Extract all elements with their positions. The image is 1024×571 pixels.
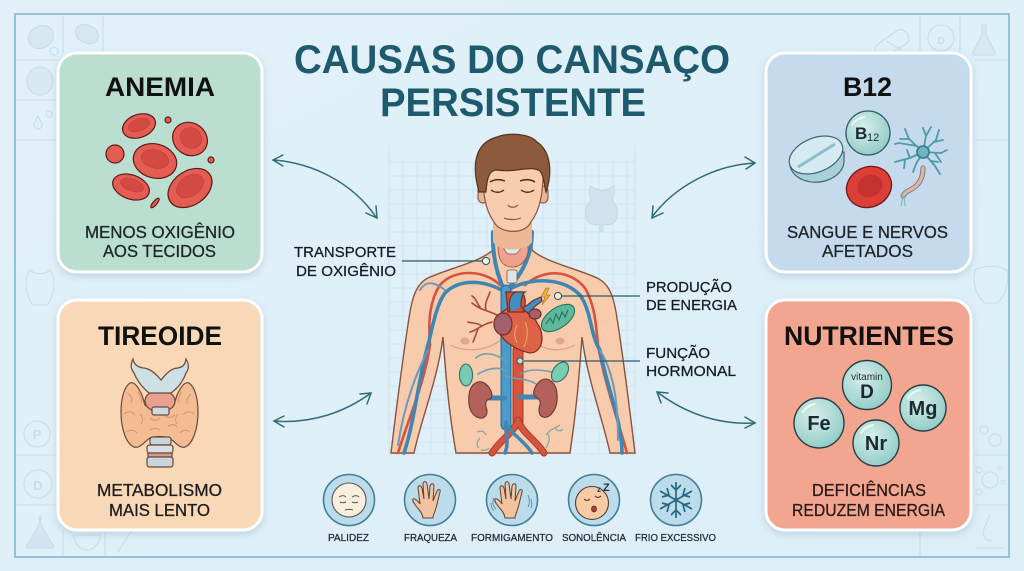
symptom: sonolência: z (597, 485, 601, 494)
arteries (398, 273, 627, 453)
closed eyes, nose and mouth (490, 180, 535, 192)
heading: nutrientes: NUTRIENTES (784, 321, 954, 351)
symptom: frio excessivo: FRIO EXCESSIVO (635, 532, 716, 544)
icon: magnesium sphere (900, 385, 946, 431)
symptom: frio excessivo (635, 474, 716, 544)
energy bolt (541, 288, 550, 305)
title: CAUSAS DO CANSAÇO (294, 38, 730, 82)
icon: vitamin d sphere: vitamin (851, 372, 883, 383)
arrow: nutrientes to body (657, 392, 755, 428)
icon: nr sphere: Nr (865, 433, 887, 455)
text: sangue e nervos (787, 222, 948, 261)
icon: vitamin d sphere (842, 360, 892, 410)
neck thyroid (498, 240, 528, 283)
icon: nr sphere (853, 420, 899, 466)
veins (398, 232, 622, 453)
icon: red blood cells (106, 109, 219, 216)
symptom: formigamento: FORMIGAMENTO (471, 532, 553, 544)
icon: red blood cell (840, 159, 898, 215)
body silhouette (391, 238, 635, 453)
text: metabolismo: METABOLISMO (97, 480, 222, 500)
hair (475, 134, 550, 192)
panel: nutrientes (766, 300, 971, 530)
arrow: b12 to body (652, 157, 755, 218)
callout: transporte de oxigênio (294, 245, 490, 280)
panel: tireoide (58, 300, 262, 530)
callout: função hormonal: HORMONAL (646, 364, 736, 380)
lung branches (468, 292, 497, 342)
symptom: fraqueza: FRAQUEZA (404, 532, 457, 544)
heading: tireoide: TIREOIDE (98, 321, 222, 351)
text: menos oxigênio: AOS TECIDOS (103, 241, 216, 261)
heading: anemia: ANEMIA (105, 72, 215, 102)
arrow: tireoide to body (274, 393, 371, 427)
callout: produção de energia (554, 279, 737, 314)
callout: transporte de oxigênio: TRANSPORTE (294, 245, 396, 261)
faint thyroid watermark (586, 186, 617, 231)
symptom: formigamento (471, 474, 553, 544)
body background grid (388, 146, 636, 454)
pelvic nerves (477, 425, 563, 450)
symptom: palidez (324, 474, 374, 544)
text: sangue e nervos: AFETADOS (822, 241, 913, 261)
text: D (937, 36, 945, 47)
text: D (33, 478, 43, 493)
panel: anemia (58, 53, 262, 272)
callout: função hormonal: FUNÇÃO (646, 345, 710, 362)
text: deficiências: REDUZEM ENERGIA (792, 500, 945, 520)
text: sangue e nervos: SANGUE E NERVOS (787, 222, 948, 242)
title (294, 38, 730, 125)
title: PERSISTENTE (380, 81, 646, 125)
callout: transporte de oxigênio: DE OXIGÊNIO (296, 263, 396, 280)
icon: magnesium sphere: Mg (909, 398, 937, 420)
icon: pill (784, 129, 848, 182)
text: menos oxigênio (85, 222, 235, 261)
text: P (33, 427, 42, 442)
illustration: human body (391, 134, 635, 453)
symptom: palidez: PALIDEZ (328, 532, 370, 544)
mitochondria (460, 299, 579, 386)
kidneys (469, 379, 557, 418)
icon: iron sphere (794, 398, 844, 448)
symptom: fraqueza (404, 474, 457, 544)
symptom: sonolência: SONOLÊNCIA (562, 531, 626, 544)
icon: thyroid gland (121, 359, 198, 467)
icon: b12 sphere: B (855, 124, 867, 143)
icon: iron sphere: Fe (807, 413, 831, 435)
text: deficiências: DEFICIÊNCIAS (812, 480, 926, 500)
head (475, 134, 550, 250)
symptom: sonolência (562, 474, 626, 544)
text: menos oxigênio: MENOS OXIGÊNIO (85, 222, 235, 242)
chest details (450, 338, 575, 350)
text: metabolismo: MAIS LENTO (109, 500, 210, 520)
callout: produção de energia: PRODUÇÃO (646, 279, 732, 296)
icon: b12 sphere (846, 111, 890, 155)
callout: função hormonal (517, 345, 736, 380)
arrow: anemia to body (273, 155, 377, 218)
icon: vitamin d sphere: D (860, 382, 874, 403)
symptom: sonolência: Z (603, 482, 610, 494)
text: metabolismo (97, 480, 222, 520)
icon: neuron (895, 127, 947, 206)
text: deficiências (792, 480, 945, 520)
heading: b12: B12 (843, 72, 892, 102)
heart (494, 292, 542, 353)
icon: b12 sphere: 12 (867, 132, 879, 144)
panel: b12 (766, 53, 971, 272)
callout: produção de energia: DE ENERGIA (646, 298, 737, 314)
